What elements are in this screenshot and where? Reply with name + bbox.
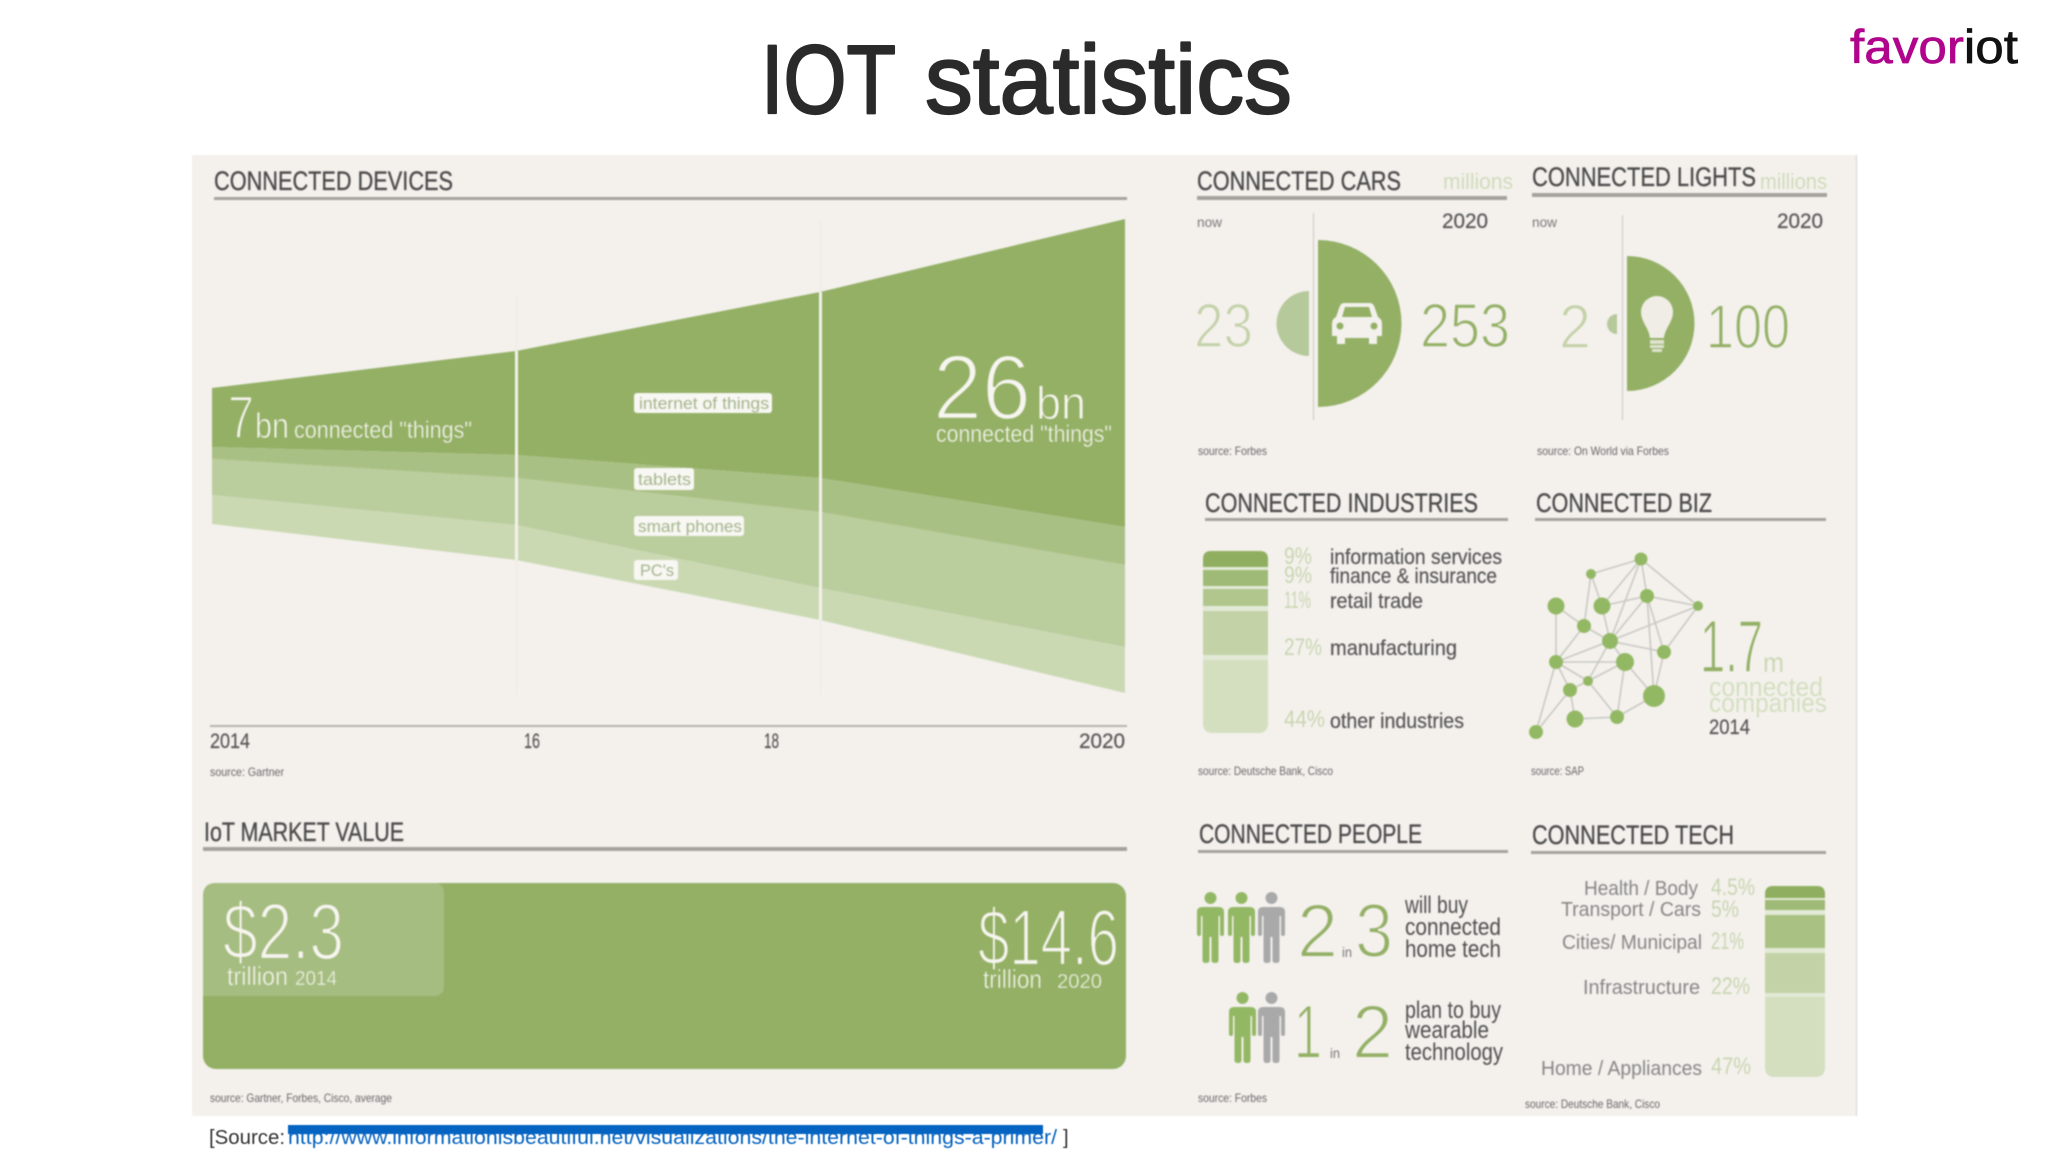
label: information services 9% xyxy=(1284,543,1502,570)
source citation line: http://www.informationisbeautiful.net/visualizations/the-internet-of-things-a-primer/ xyxy=(288,1127,1057,1149)
label: other industries 44%: other industries xyxy=(1330,710,1464,733)
network diagram xyxy=(1529,552,1703,739)
panel: connected biz xyxy=(1529,488,1827,778)
label: cities and municipal 21% xyxy=(1562,928,1744,955)
infographic panel xyxy=(192,155,1857,1116)
heading: connected industries: CONNECTED INDUSTRIES xyxy=(1205,488,1478,518)
text: plan to buy wearable technology: wearable xyxy=(1404,1017,1489,1044)
axis: years: 16 xyxy=(524,730,540,753)
heading: IoT market value: IoT MARKET VALUE xyxy=(204,817,404,847)
callout: 26bn connected things: bn xyxy=(1036,377,1086,429)
label: health and body 4.5%: 4.5% xyxy=(1711,874,1755,901)
callout: 26bn connected things: connected "things" xyxy=(936,421,1112,448)
value: $14.6 trillion 2020: trillion xyxy=(983,964,1042,994)
value: $14.6 trillion 2020 xyxy=(978,893,1119,994)
legend tag: internet of things: internet of things xyxy=(639,394,769,413)
panel: connected tech xyxy=(1525,820,1826,1111)
text: will buy connected home tech xyxy=(1404,892,1501,963)
label: transport and cars 5% xyxy=(1561,896,1739,923)
panel: connected devices xyxy=(210,166,1127,779)
title: IOT xyxy=(761,25,896,134)
title xyxy=(761,25,1292,134)
panel: connected lights: now xyxy=(1532,214,1558,230)
label: home and appliances 47%: Home / Appliances xyxy=(1541,1058,1702,1080)
value: $14.6 trillion 2020: $14.6 xyxy=(978,893,1119,982)
source note: source: SAP xyxy=(1531,764,1584,778)
label: infrastructure 22%: 22% xyxy=(1711,973,1750,1000)
label: finance and insurance 9%: 9% xyxy=(1284,562,1312,589)
heading: connected lights: CONNECTED LIGHTS xyxy=(1532,162,1756,192)
label: home and appliances 47% xyxy=(1541,1053,1751,1080)
value: 1.7m connected companies 2014: 1.7 xyxy=(1700,605,1763,688)
heading: connected cars: CONNECTED CARS xyxy=(1197,166,1401,196)
source note: source: On World via Forbes xyxy=(1537,444,1669,458)
stacked bar: industries xyxy=(1203,551,1268,733)
panel: connected cars: 2020 xyxy=(1442,210,1488,233)
axis: years: 2020 xyxy=(1079,730,1125,753)
value: 100: 100 xyxy=(1706,293,1790,362)
label: retail trade 11%: retail trade xyxy=(1330,590,1423,613)
source citation line: ] xyxy=(1063,1127,1069,1149)
bar: 2020 market value xyxy=(203,883,1126,1069)
heading: connected tech: CONNECTED TECH xyxy=(1532,820,1734,850)
callout: 7bn connected things xyxy=(228,384,472,451)
label: other industries 44%: 44% xyxy=(1284,706,1325,733)
label: retail trade 11% xyxy=(1284,587,1423,614)
label: home and appliances 47%: 47% xyxy=(1711,1053,1751,1080)
label: cities and municipal 21%: 21% xyxy=(1711,928,1744,955)
stacked bar: tech xyxy=(1765,886,1825,1077)
label: transport and cars 5%: Transport / Cars xyxy=(1561,899,1701,921)
title: statistics xyxy=(925,25,1292,134)
value: 2 in 3: 2 xyxy=(1297,889,1338,974)
callout: 26bn connected things: 26 xyxy=(933,337,1031,439)
text: will buy connected home tech: will buy xyxy=(1404,892,1468,919)
value: $2.3 trillion 2014: trillion xyxy=(227,961,288,991)
label: infrastructure 22%: Infrastructure xyxy=(1583,977,1700,999)
source note: source: Deutsche Bank, Cisco xyxy=(1525,1097,1660,1111)
value: $2.3 trillion 2014: 2014 xyxy=(295,968,337,990)
text: plan to buy wearable technology: plan to buy xyxy=(1405,997,1501,1024)
panel: connected cars: now xyxy=(1197,214,1223,230)
heading: connected devices: CONNECTED DEVICES xyxy=(214,166,453,196)
value: 2: 2 xyxy=(1559,293,1591,362)
icon: light bulb xyxy=(1641,296,1673,352)
panel: IoT market value xyxy=(203,817,1127,1105)
half circle: 23 now xyxy=(1276,291,1309,356)
panel: connected lights xyxy=(1532,162,1827,458)
icon: car xyxy=(1332,303,1382,344)
value: $2.3 trillion 2014: $2.3 xyxy=(223,887,344,976)
label: cities and municipal 21%: Cities/ Municipal xyxy=(1562,932,1702,954)
text: plan to buy wearable technology xyxy=(1404,997,1503,1066)
value: 1 in 2 xyxy=(1294,990,1393,1075)
source citation line: [Source: xyxy=(209,1127,285,1149)
value: 2 in 3: in xyxy=(1342,944,1352,960)
value: 1.7m connected companies 2014 xyxy=(1700,605,1827,739)
axis: years: 2014 xyxy=(210,730,250,753)
legend tag: tablets: tablets xyxy=(638,470,691,489)
label: finance and insurance 9% xyxy=(1284,562,1497,589)
value: 253: 253 xyxy=(1420,292,1510,361)
heading: connected people: CONNECTED PEOPLE xyxy=(1199,819,1422,849)
value: 1 in 2: 2 xyxy=(1352,990,1393,1075)
area chart: connected things growth xyxy=(212,219,1125,693)
label: health and body 4.5%: Health / Body xyxy=(1584,878,1698,900)
logo: favoriot: favoriot xyxy=(1850,20,2018,73)
unit label: millions xyxy=(1443,169,1513,194)
icon: people 2 in 3 xyxy=(1197,892,1285,963)
value: 1 in 2: in xyxy=(1330,1045,1340,1061)
value: $2.3 trillion 2014 xyxy=(223,887,344,991)
legend tag: smart phones: smart phones xyxy=(638,517,742,536)
value: 1.7m connected companies 2014: 2014 xyxy=(1709,716,1750,739)
value: 1.7m connected companies 2014: m xyxy=(1763,647,1784,678)
value: 2 in 3 xyxy=(1297,889,1393,974)
value: 1.7m connected companies 2014: connected xyxy=(1709,672,1823,702)
panel: connected people xyxy=(1197,819,1508,1105)
text: will buy connected home tech: connected xyxy=(1405,914,1501,941)
text: will buy connected home tech: home tech xyxy=(1405,936,1501,963)
panel: connected cars xyxy=(1194,166,1513,458)
label: infrastructure 22% xyxy=(1583,973,1750,1000)
half circle: 253 in 2020 xyxy=(1318,240,1402,407)
text: plan to buy wearable technology: technology xyxy=(1405,1039,1503,1066)
value: $14.6 trillion 2020: 2020 xyxy=(1057,971,1102,993)
source note: source: Forbes xyxy=(1198,1091,1267,1105)
label: retail trade 11%: 11% xyxy=(1284,587,1311,614)
bar: 2014 market value xyxy=(203,883,444,996)
label: transport and cars 5%: 5% xyxy=(1711,896,1739,923)
value: 2 in 3: 3 xyxy=(1355,889,1393,974)
panel: connected industries xyxy=(1198,488,1508,778)
half circle: 100 in 2020 xyxy=(1627,256,1694,391)
source note: source: Deutsche Bank, Cisco xyxy=(1198,764,1333,778)
source note: source: Gartner, Forbes, Cisco, average xyxy=(210,1091,392,1105)
label: finance and insurance 9%: finance & insurance xyxy=(1330,565,1497,588)
unit label: millions xyxy=(1760,169,1827,194)
label: manufacturing 27% xyxy=(1284,634,1457,661)
value: 1 in 2: 1 xyxy=(1294,990,1322,1075)
half circle: 2 now xyxy=(1607,314,1617,334)
axis: years xyxy=(210,725,1127,753)
axis: years: 18 xyxy=(764,730,779,753)
panel: connected lights: 2020 xyxy=(1777,210,1823,233)
value: 1.7m connected companies 2014: companies xyxy=(1709,688,1827,718)
label: other industries 44% xyxy=(1284,706,1464,733)
callout: 26bn connected things xyxy=(933,337,1112,448)
value: 23: 23 xyxy=(1194,292,1253,361)
legend tag: PCs: PC's xyxy=(640,561,674,580)
label: manufacturing 27%: 27% xyxy=(1284,634,1322,661)
callout: 7bn connected things: 7 xyxy=(228,384,254,451)
source note: source: Gartner xyxy=(210,765,284,779)
heading: connected biz: CONNECTED BIZ xyxy=(1536,488,1712,518)
label: information services 9%: information services xyxy=(1330,546,1502,569)
label: manufacturing 27%: manufacturing xyxy=(1330,637,1457,660)
callout: 7bn connected things: connected "things" xyxy=(294,417,472,444)
label: information services 9%: 9% xyxy=(1284,543,1312,570)
callout: 7bn connected things: bn xyxy=(255,405,289,446)
source note: source: Forbes xyxy=(1198,444,1267,458)
icon: people 1 in 2 xyxy=(1229,992,1285,1063)
label: health and body 4.5% xyxy=(1584,874,1755,901)
